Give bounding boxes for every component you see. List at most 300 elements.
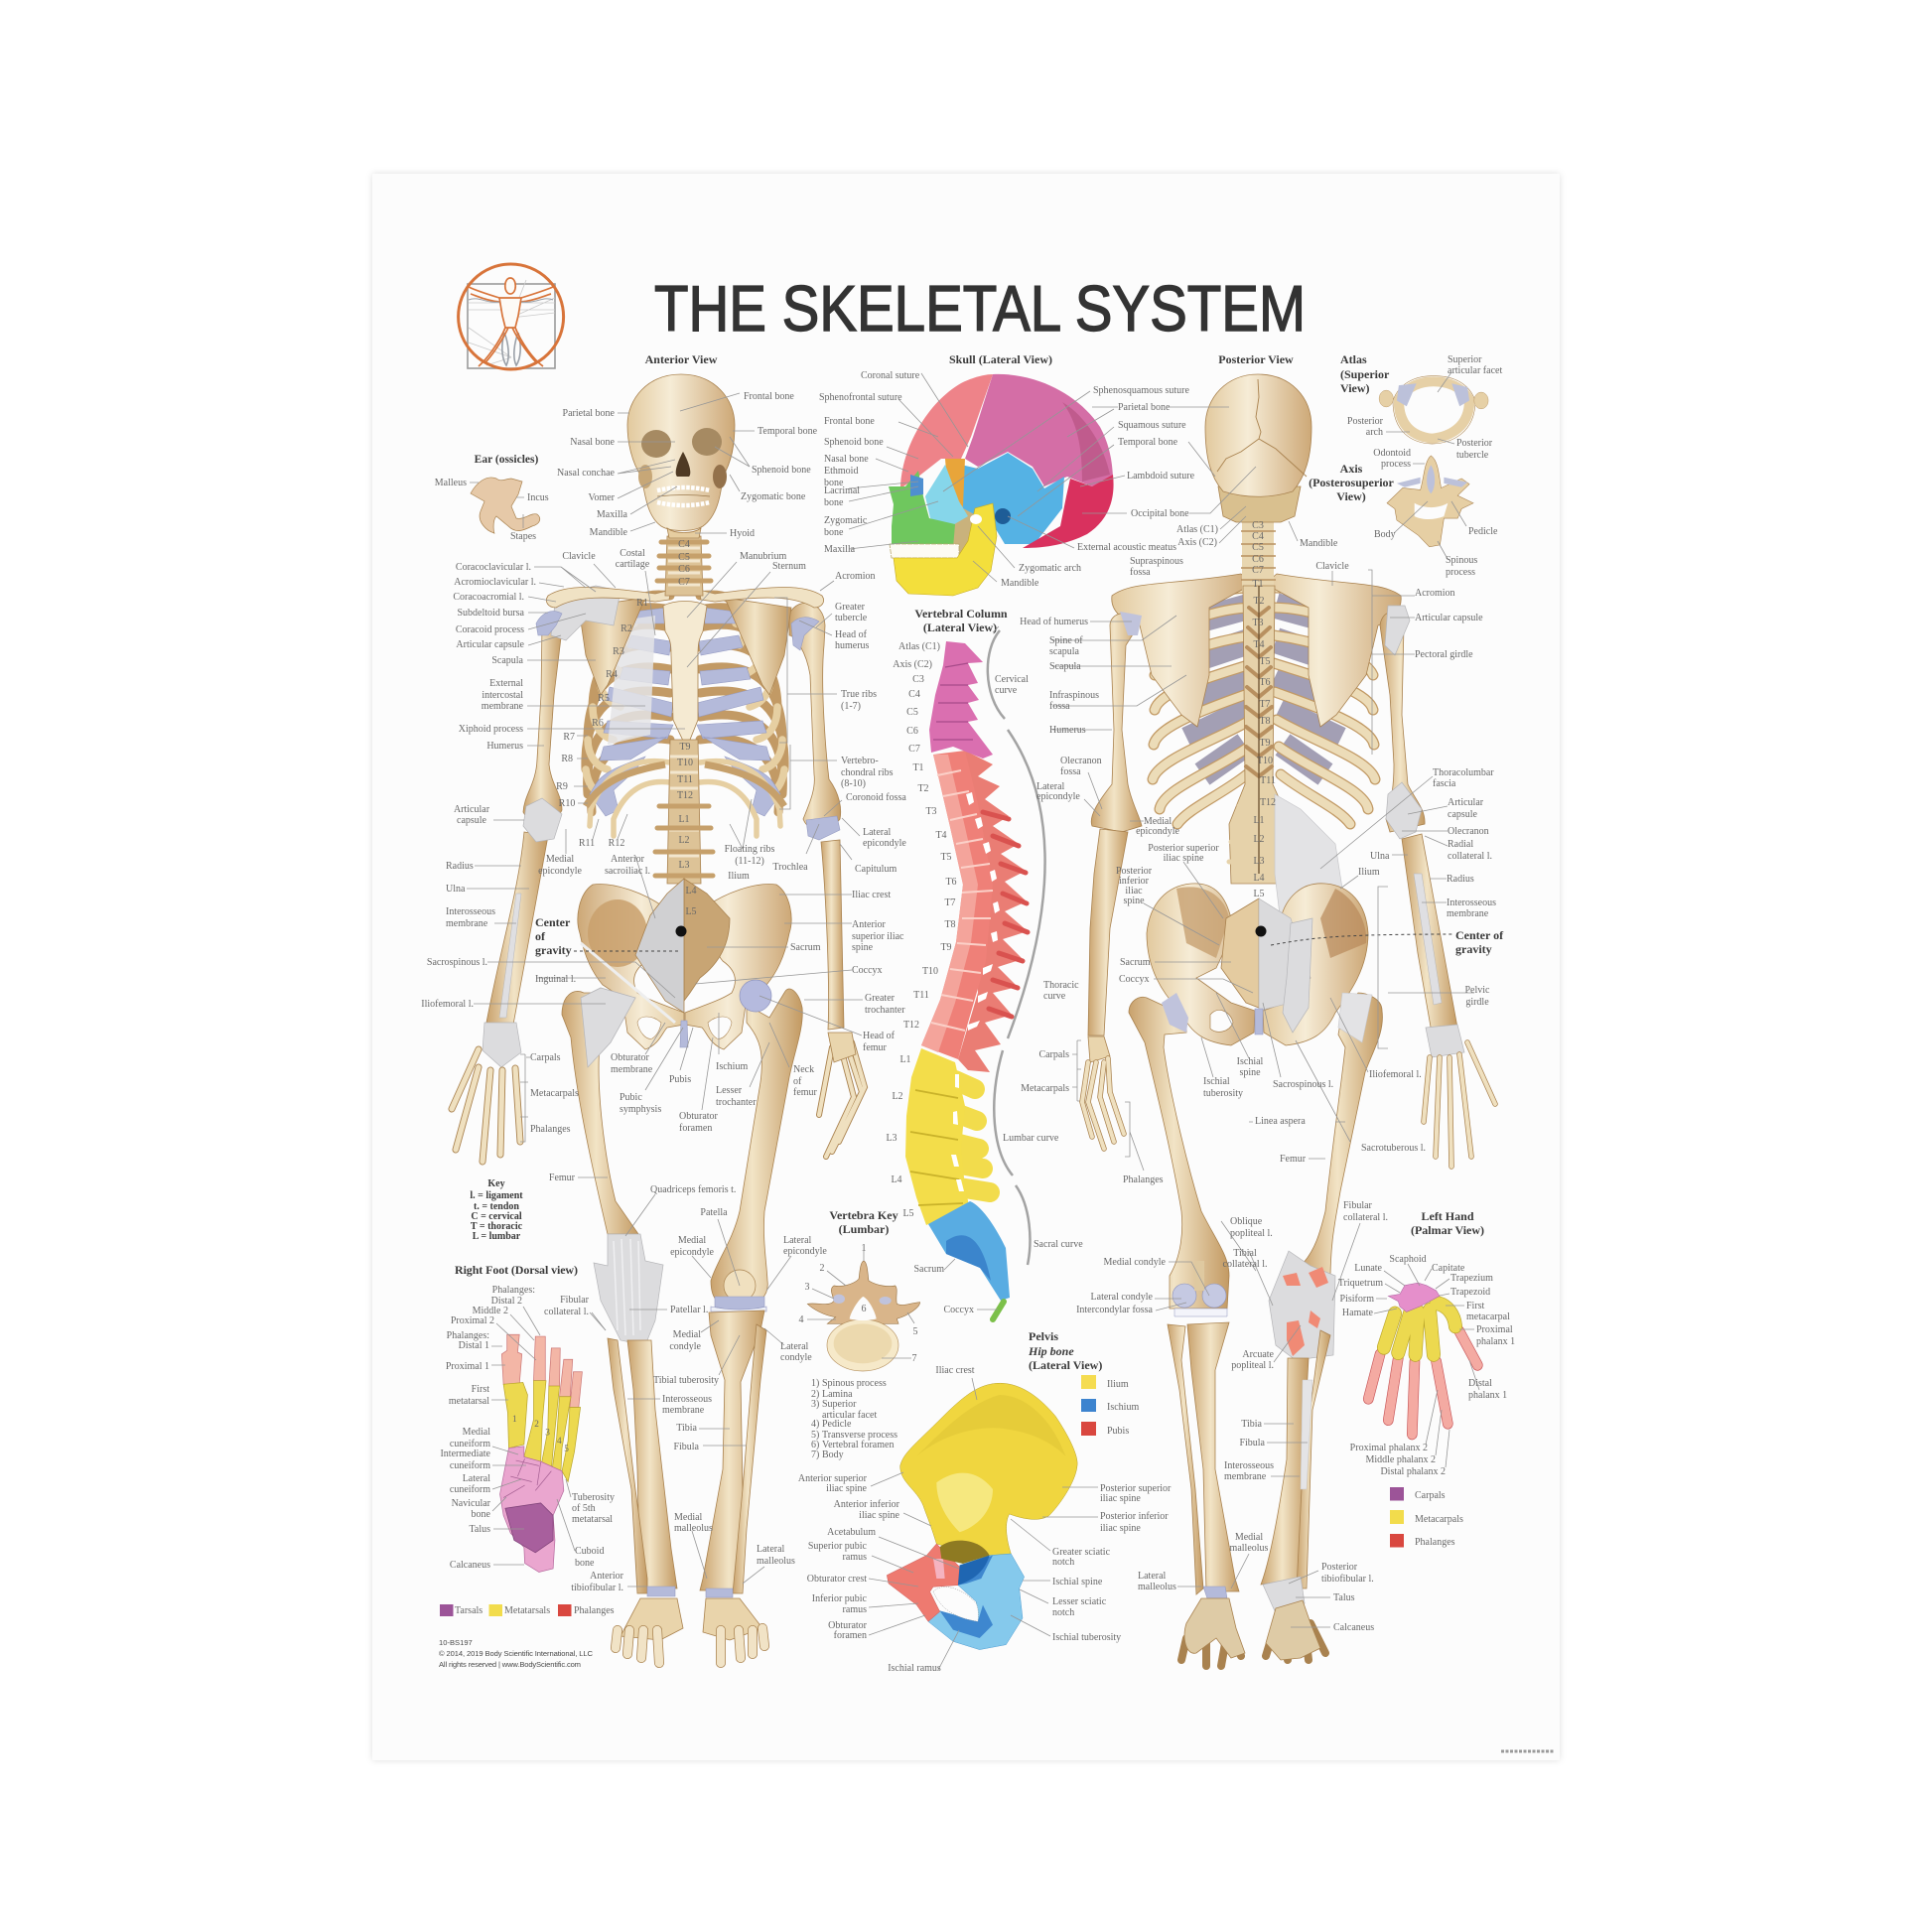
posterior vertebra labels: T2 — [1253, 596, 1265, 607]
posterior view labels: Fibular — [1343, 1200, 1373, 1211]
panel: left hand: Distal phalanx 2 — [1380, 1466, 1446, 1477]
anterior vertebra and rib labels — [592, 539, 697, 917]
heading: anterior view: Anterior View — [645, 352, 718, 366]
panel: vertebral column: Coccyx — [943, 1305, 974, 1315]
anterior view labels: Phalanges — [530, 1124, 571, 1135]
posterior view labels: Coccyx — [1119, 974, 1150, 985]
lumbar vertebra illustration — [807, 1261, 920, 1371]
panel: lateral skull: Occipital bone — [1131, 508, 1189, 519]
skull illustration — [889, 374, 1114, 596]
panel: vertebral column: Sacrum — [913, 1264, 944, 1275]
anterior view labels: Ilium — [728, 871, 750, 882]
posterior vertebra labels: L3 — [1253, 856, 1265, 867]
anterior view labels: Inguinal l. — [535, 974, 576, 985]
anterior vertebra and rib labels: R4 — [606, 669, 618, 680]
panel: vertebra key: 2) — [811, 1389, 819, 1400]
panel: vertebral column: T6 — [945, 877, 957, 888]
anterior view labels: Clavicle — [562, 551, 596, 562]
heading: pelvis: Pelvis — [1029, 1329, 1058, 1343]
posterior view labels: Ulna — [1370, 851, 1390, 862]
heading: pelvis: (Lateral View) — [1029, 1358, 1102, 1372]
anterior view labels: Carpals — [530, 1052, 561, 1063]
panel: lateral skull: Temporal bone — [1118, 437, 1178, 448]
panel: vertebra key: articular facet — [822, 1410, 877, 1421]
anterior view labels: R9 — [556, 781, 568, 792]
anterior view labels: Articular capsule — [456, 639, 525, 650]
panel: lateral skull: Sphenosquamous suture — [1093, 385, 1189, 396]
panel: pelvis hip bone: ramus — [843, 1604, 867, 1615]
panel: right foot: metatarsal — [572, 1514, 613, 1525]
anterior view labels: malleolus — [757, 1556, 795, 1567]
anterior view labels: Patella — [700, 1207, 728, 1218]
panel: left hand: Triquetrum — [1338, 1278, 1383, 1289]
panel: vertebra key: 7) — [811, 1449, 819, 1460]
anterior view labels: Greater — [865, 993, 896, 1004]
posterior view labels: Posterior — [1116, 866, 1153, 877]
anterior view labels: Vomer — [589, 492, 616, 503]
posterior view labels: Sacrotuberous l. — [1361, 1143, 1426, 1154]
anterior vertebra and rib labels: T9 — [679, 742, 691, 753]
posterior view labels: Spine of — [1049, 635, 1083, 646]
panel: vertebral column: Lumbar curve — [1003, 1133, 1059, 1144]
posterior view labels: Oblique — [1230, 1216, 1263, 1227]
panel: lateral skull: Coronal suture — [861, 370, 920, 381]
heading: left hand — [1411, 1209, 1484, 1237]
posterior view labels: iliac spine — [1164, 853, 1204, 864]
posterior view labels: Pelvic — [1465, 985, 1490, 996]
panel: pelvis hip bone: foramen — [834, 1630, 867, 1641]
anterior view labels: Center — [535, 915, 571, 929]
panel: left hand: Capitate — [1432, 1263, 1465, 1274]
panel: vertebral column: C3 — [912, 674, 924, 685]
panel: vertebral column: Lateral — [1036, 781, 1065, 792]
anterior view labels: trochanter — [865, 1005, 905, 1016]
anterior view labels: Ischium — [716, 1061, 748, 1072]
foot legend — [440, 1604, 615, 1616]
anterior view labels: trochanter — [716, 1097, 757, 1108]
posterior view labels: Olecranon — [1060, 756, 1102, 766]
panel: vertebral column: L1 — [899, 1054, 911, 1065]
panel: right foot: bone — [575, 1558, 595, 1569]
anterior view labels: External — [489, 678, 523, 689]
panel: pelvis hip bone: Ischial tuberosity — [1052, 1632, 1121, 1643]
panel: right foot: bone — [472, 1509, 491, 1520]
anterior view labels: membrane — [662, 1405, 705, 1416]
posterior view labels: Posterior — [1321, 1562, 1358, 1573]
posterior view labels: Metacarpals — [1021, 1083, 1069, 1094]
heading: right foot: Right Foot (Dorsal view) — [455, 1263, 578, 1277]
panel: pelvis hip bone: ramus — [843, 1552, 867, 1563]
anterior view labels: Coracoclavicular l. — [456, 562, 531, 573]
panel: vertebra key: 3 — [804, 1282, 810, 1293]
heading: vertebral column: (Lateral View) — [923, 621, 997, 634]
heading: axis: View) — [1336, 489, 1366, 503]
spinal curve lines — [988, 630, 1045, 1265]
posterior view labels: fossa — [1060, 766, 1081, 777]
posterior view labels: iliac — [1125, 886, 1143, 897]
anterior view labels: sacroiliac l. — [605, 866, 650, 877]
anterior view labels — [421, 391, 906, 1593]
panel: atlas and axis: Posterior — [1347, 416, 1384, 427]
panel: vertebral column: Cervical — [995, 674, 1029, 685]
anterior view labels: Ulna — [446, 884, 466, 895]
anterior view labels: Coracoacromial l. — [453, 592, 524, 603]
panel: vertebra key: 1 — [862, 1243, 866, 1254]
panel: vertebra key: 5 — [913, 1326, 917, 1337]
panel: left hand: Distal — [1468, 1378, 1492, 1389]
anterior vertebra and rib labels: L5 — [685, 906, 697, 917]
posterior view labels: Olecranon — [1448, 826, 1489, 837]
panel: vertebra key: 4) — [811, 1419, 819, 1430]
panel: vertebral column: T4 — [935, 830, 947, 841]
panel: pelvis hip bone: Iliac crest — [935, 1365, 975, 1376]
panel: pelvis hip bone: Obturator — [828, 1620, 868, 1631]
poster sheet — [372, 174, 1560, 1760]
anterior view labels: Xiphoid process — [459, 724, 523, 735]
posterior view labels: Radius — [1447, 874, 1474, 885]
anterior view labels: Articular — [454, 804, 490, 815]
panel: pelvis hip bone: Posterior superior — [1100, 1483, 1172, 1494]
panel: vertebra key: Pedicle — [822, 1419, 852, 1430]
panel: left hand: metacarpal — [1466, 1311, 1510, 1322]
panel: right foot: Proximal 2 — [451, 1315, 494, 1326]
posterior view labels — [1020, 352, 1504, 1633]
panel: pelvis hip bone: Lesser sciatic — [1052, 1596, 1107, 1607]
panel: vertebral column: T10 — [922, 966, 938, 977]
panel: right foot: Talus — [469, 1524, 490, 1535]
posterior view labels: Center of — [1455, 928, 1504, 942]
hand legend: Carpals — [1415, 1490, 1446, 1501]
posterior view labels: membrane — [1447, 908, 1489, 919]
panel: pelvis hip bone: iliac spine — [826, 1483, 868, 1494]
panel: vertebra key: 6 — [862, 1304, 866, 1314]
heading: left hand: Left Hand — [1421, 1209, 1474, 1223]
anterior view labels: Temporal bone — [758, 426, 818, 437]
anterior view labels: Fibular — [560, 1295, 590, 1306]
panel: right foot: Distal 1 — [459, 1340, 489, 1351]
posterior view labels: fossa — [1130, 567, 1151, 578]
panel: right foot — [440, 1263, 615, 1616]
posterior view labels: Tibia — [1241, 1419, 1263, 1430]
anterior left arm — [452, 613, 562, 1162]
panel: lateral skull: External acoustic meatus — [1077, 542, 1176, 553]
heading: skull: Skull (Lateral View) — [949, 352, 1052, 366]
posterior vertebra labels: T10 — [1257, 756, 1273, 766]
anterior view labels: malleolus — [674, 1523, 713, 1534]
panel: left hand: Proximal — [1476, 1324, 1513, 1335]
panel: posterior skeleton — [1082, 374, 1495, 1666]
panel: vertebral column: Thoracic — [1043, 980, 1079, 991]
heading: pelvis — [1028, 1329, 1102, 1372]
anterior right arm — [789, 603, 865, 1157]
heading: atlas: Atlas — [1340, 352, 1367, 366]
panel: vertebral column: T2 — [917, 783, 929, 794]
posterior arms — [1082, 606, 1495, 1167]
panel: vertebral column: curve — [1043, 991, 1066, 1002]
anterior view labels: membrane — [611, 1064, 653, 1075]
anterior view labels: R12 — [609, 838, 624, 849]
posterior view labels: Linea aspera — [1255, 1116, 1306, 1127]
panel: atlas and axis: Posterior — [1456, 438, 1493, 449]
panel: lateral skull: Lambdoid suture — [1127, 471, 1195, 482]
posterior view labels: girdle — [1465, 997, 1489, 1008]
thoracolumbar fascia — [1275, 794, 1342, 923]
anterior view labels: Acromion — [835, 571, 876, 582]
panel: pelvis hip bone: notch — [1052, 1557, 1074, 1568]
posterior view labels: Clavicle — [1315, 561, 1349, 572]
foot illustration: 2 — [534, 1420, 539, 1430]
panel: lateral skull: Nasal bone — [824, 454, 869, 465]
panel: vertebral column: C4 — [908, 689, 920, 700]
anterior vertebra and rib labels: L4 — [685, 886, 697, 897]
hip legend: Ischium — [1107, 1402, 1139, 1413]
posterior view labels: Lateral — [1138, 1571, 1167, 1582]
abbreviation key: L = lumbar — [473, 1231, 521, 1242]
anterior ribcage — [586, 595, 784, 836]
panel: vertebral column: C5 — [906, 707, 918, 718]
panel: pelvis hip bone: iliac spine — [1100, 1523, 1141, 1534]
posterior vertebra labels: T1 — [1252, 579, 1264, 590]
anterior view labels: (8-10) — [841, 778, 866, 789]
abbreviation key: C = cervical — [471, 1211, 522, 1222]
anterior view labels: Radius — [446, 861, 474, 872]
anterior view labels: Tibial tuberosity — [653, 1375, 719, 1386]
anterior view labels: Greater — [835, 602, 866, 613]
anterior view labels: Trochlea — [772, 862, 808, 873]
posterior vertebra labels: T4 — [1253, 639, 1265, 650]
panel: right foot: metatarsal — [449, 1396, 489, 1407]
hand legend: Phalanges — [1415, 1537, 1455, 1548]
posterior view labels: Carpals — [1038, 1049, 1069, 1060]
anterior view labels: True ribs — [841, 689, 877, 700]
anterior view labels: Interosseous — [662, 1394, 712, 1405]
panel: atlas and axis: arch — [1366, 427, 1383, 438]
panel: anterior skeleton — [452, 374, 865, 1663]
posterior vertebra labels: T8 — [1259, 716, 1271, 727]
hip legend: Ilium — [1107, 1379, 1129, 1390]
posterior view labels: fossa — [1049, 701, 1070, 712]
anterior view labels: gravity — [535, 943, 572, 957]
anterior view labels: cartilage — [616, 559, 650, 570]
posterior view labels: Acromion — [1415, 588, 1455, 599]
anterior view labels: Tibia — [676, 1423, 698, 1434]
anterior view labels: Medial — [546, 854, 574, 865]
abbreviation key: Key — [487, 1178, 505, 1189]
posterior view labels: spine — [1239, 1067, 1261, 1078]
anterior vertebra and rib labels: T12 — [677, 790, 693, 801]
anterior view labels: Iliac crest — [852, 890, 891, 900]
anterior vertebra and rib labels: C6 — [678, 564, 690, 575]
posterior view labels: spine — [1123, 896, 1145, 906]
posterior vertebra labels: T6 — [1259, 677, 1271, 688]
anterior view labels: Fibula — [673, 1442, 700, 1452]
anterior view labels: superior iliac — [852, 931, 904, 942]
posterior view labels: Sacrospinous l. — [1273, 1079, 1333, 1090]
posterior vertebra labels: T11 — [1260, 775, 1276, 786]
panel: vertebral column: T1 — [912, 762, 924, 773]
anterior vertebra and rib labels: T10 — [677, 758, 693, 768]
panel: right foot: First — [472, 1384, 489, 1395]
panel: vertebra key: 6) — [811, 1440, 819, 1450]
anterior view labels: Patellar l. — [670, 1305, 708, 1315]
posterior view labels: Scapula — [1049, 661, 1081, 672]
panel: vertebral column: T12 — [903, 1020, 919, 1031]
panel: lateral skull: bone — [824, 527, 844, 538]
anterior view labels: spine — [852, 942, 874, 953]
panel: lateral skull — [819, 352, 1195, 596]
panel: pelvis hip bone: Obturator crest — [807, 1574, 867, 1585]
panel: left hand: Middle phalanx 2 — [1365, 1454, 1436, 1465]
panel: left hand: First — [1466, 1301, 1485, 1311]
anterior view labels: Obturator — [679, 1111, 719, 1122]
panel: right foot: Medial — [463, 1427, 490, 1438]
anterior view labels: epicondyle — [538, 866, 582, 877]
panel: atlas and axis: Pedicle — [1468, 526, 1498, 537]
anterior view labels: foramen — [679, 1123, 712, 1134]
panel: vertebral column: C6 — [906, 726, 918, 737]
panel: vertebra key: 5) — [811, 1430, 819, 1441]
posterior view labels: Interosseous — [1447, 897, 1496, 908]
copyright block: © 2014, 2019 Body Scientific International, LLC — [439, 1649, 594, 1658]
posterior vertebra labels — [1252, 520, 1276, 899]
panel: vertebral column: L4 — [891, 1174, 902, 1185]
panel: lateral skull: bone — [824, 497, 844, 508]
anterior vertebra and rib labels: R5 — [598, 693, 610, 704]
panel: right foot: Lateral — [463, 1473, 490, 1484]
anterior view labels: Obturator — [611, 1052, 650, 1063]
foot illustration: 4 — [557, 1437, 562, 1447]
panel: ear ossicles: Stapes — [510, 531, 536, 542]
panel: left hand: phalanx 1 — [1468, 1390, 1507, 1401]
anterior spine — [655, 536, 713, 884]
posterior vertebra labels: L1 — [1253, 815, 1265, 826]
panel: lateral skull: Frontal bone — [824, 416, 875, 427]
posterior vertebra labels: T5 — [1259, 656, 1271, 667]
anterior view labels: Head of — [835, 629, 868, 640]
anterior skull — [627, 374, 735, 538]
panel: pelvis hip bone: Acetabulum — [827, 1527, 876, 1538]
anterior view labels: Vertebro- — [841, 756, 879, 766]
panel: lateral skull: Lacrimal — [824, 485, 860, 496]
anterior view labels: Femur — [549, 1173, 576, 1183]
anterior view labels: Costal — [620, 548, 645, 559]
panel: left hand: phalanx 1 — [1476, 1336, 1515, 1347]
anterior view labels: Hyoid — [730, 528, 755, 539]
panel: pelvis hip bone: iliac spine — [1100, 1493, 1141, 1504]
panel: lateral skull: Sphenofrontal suture — [819, 392, 902, 403]
anterior vertebra and rib labels: L1 — [678, 814, 690, 825]
posterior view labels: Humerus — [1049, 725, 1086, 736]
panel: left hand: Trapezoid — [1450, 1287, 1490, 1298]
anterior view labels: epicondyle — [783, 1246, 827, 1257]
panel: lateral skull: Mandible — [1001, 578, 1039, 589]
panel: lateral skull: bone — [824, 478, 844, 488]
anterior vertebra and rib labels: C5 — [678, 552, 690, 563]
panel: right foot: Phalanges: — [447, 1330, 489, 1341]
anterior view labels: Capitulum — [855, 864, 897, 875]
anterior view labels: Zygomatic bone — [741, 491, 806, 502]
panel: vertebral column: Axis (C2) — [893, 659, 932, 670]
posterior vertebra labels: T7 — [1259, 699, 1271, 710]
posterior vertebra labels: C7 — [1252, 565, 1264, 576]
anterior view labels: R11 — [579, 838, 595, 849]
panel: lateral skull: Squamous suture — [1118, 420, 1186, 431]
posterior view labels: capsule — [1448, 809, 1478, 820]
posterior view labels: Thoracolumbar — [1433, 767, 1494, 778]
panel: pelvis hip bone: Ischial ramus — [888, 1663, 941, 1674]
anterior femurs — [562, 980, 802, 1307]
panel: left hand: Scaphoid — [1389, 1254, 1427, 1265]
anterior vertebra and rib labels: R2 — [621, 623, 632, 634]
posterior view labels: Intercondylar fossa — [1076, 1305, 1154, 1315]
posterior view labels: Medial condyle — [1104, 1257, 1167, 1268]
anterior view labels: tubercle — [835, 613, 868, 623]
hip bone illustration — [887, 1383, 1077, 1650]
posterior view labels: Talus — [1333, 1592, 1355, 1603]
posterior view labels: Lateral condyle — [1091, 1292, 1154, 1303]
anterior view labels: Pubic — [620, 1092, 642, 1103]
anterior view labels: Lesser — [716, 1085, 743, 1096]
posterior view labels: Medial — [1235, 1532, 1263, 1543]
foot legend: Metatarsals — [504, 1605, 550, 1616]
copyright block: 10-BS197 — [439, 1638, 473, 1647]
panel: atlas and axis: articular facet — [1448, 365, 1502, 376]
panel: right foot: Navicular — [452, 1498, 491, 1509]
anterior view labels: femur — [863, 1042, 888, 1053]
panel: pelvis hip bone: Ischial spine — [1052, 1577, 1103, 1587]
posterior view labels: Infraspinous — [1049, 690, 1099, 701]
vertebral column illustration — [905, 641, 1028, 1319]
anterior view labels: of — [535, 929, 546, 943]
panel: lateral skull: Zygomatic arch — [1019, 563, 1081, 574]
panel: pelvis hip bone: Anterior superior — [798, 1473, 868, 1484]
panel: vertebra key: 4 — [798, 1314, 804, 1325]
panel: right foot: Tuberosity — [572, 1492, 615, 1503]
anterior view labels: Lateral — [757, 1544, 785, 1555]
posterior vertebra labels: L5 — [1253, 889, 1265, 899]
posterior view labels: malleolus — [1138, 1582, 1176, 1592]
hip legend: Pubis — [1107, 1426, 1129, 1437]
heading: vertebra key: (Lumbar) — [839, 1222, 889, 1236]
panel: left hand: Hamate — [1342, 1308, 1374, 1318]
anterior view labels: membrane — [446, 918, 488, 929]
panel: vertebra key: Body — [822, 1449, 844, 1460]
anterior view labels: R8 — [561, 754, 573, 764]
posterior view labels: Femur — [1280, 1154, 1307, 1165]
foot illustration: 1 — [512, 1415, 517, 1425]
panel: vertebra key: Transverse process — [822, 1430, 897, 1441]
anterior vertebra and rib labels: L2 — [678, 835, 690, 846]
posterior view labels: collateral l. — [1448, 851, 1492, 862]
panel: vertebra key — [798, 1208, 920, 1460]
panel: vertebra key: Lamina — [822, 1389, 853, 1400]
posterior view labels: collateral l. — [1223, 1259, 1267, 1270]
posterior view labels: Iliofemoral l. — [1369, 1069, 1422, 1080]
abbreviation key: t. = tendon — [474, 1201, 519, 1212]
anterior view labels: intercostal — [482, 690, 523, 701]
hand illustration — [1368, 1283, 1477, 1435]
copyright block — [439, 1638, 594, 1669]
posterior view labels: Articular — [1448, 797, 1484, 808]
panel: vertebral column: T5 — [940, 852, 952, 863]
panel: pelvis hip bone: notch — [1052, 1607, 1074, 1618]
panel: lateral skull: Ethmoid — [824, 466, 858, 477]
panel: vertebra key: 2 — [820, 1263, 824, 1274]
panel: right foot: of 5th — [572, 1503, 596, 1514]
anterior view labels: Metacarpals — [530, 1088, 579, 1099]
panel: vertebral column: T8 — [944, 919, 956, 930]
anterior view labels: Coccyx — [852, 965, 883, 976]
